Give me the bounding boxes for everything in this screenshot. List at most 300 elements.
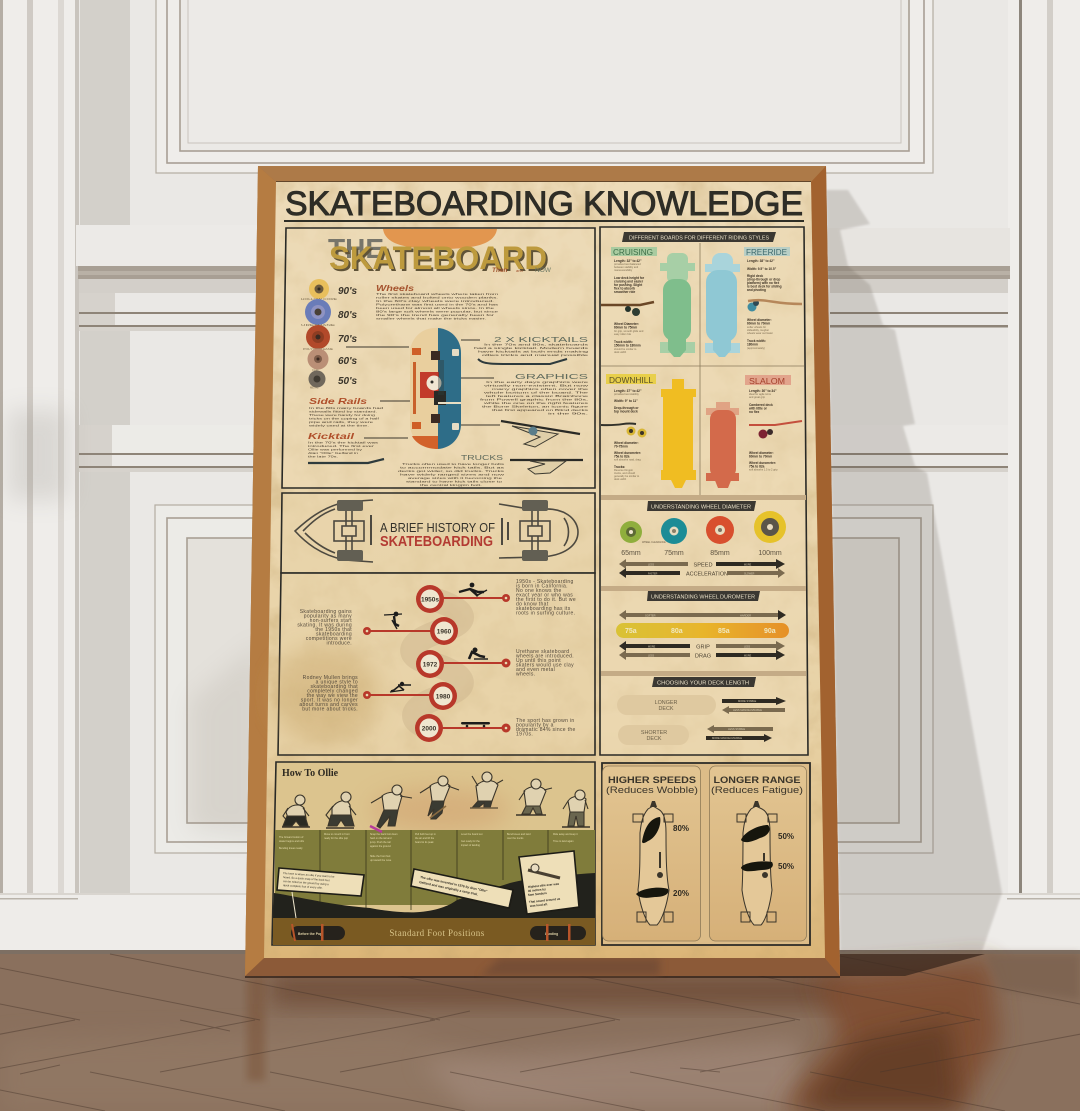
milestone 1972: 1972 bbox=[423, 662, 438, 668]
board style: slalom: with little or bbox=[748, 406, 768, 410]
board: red longboard bbox=[706, 402, 739, 488]
wheel era list: 80's bbox=[338, 310, 358, 321]
durometer scale bar: 90a bbox=[764, 628, 776, 635]
wheel era list: HOLLOW CORE bbox=[301, 297, 337, 301]
board style: cruising: maneuverability bbox=[614, 268, 633, 272]
text: graphics bbox=[480, 372, 590, 416]
wheel diameter chart: WHEEL CLEARANCE bbox=[642, 541, 666, 544]
text: wheels: the 90's the trend has generally been for bbox=[376, 313, 494, 317]
text: 1980: the way we view the bbox=[307, 693, 358, 699]
shorter deck: DECK bbox=[647, 736, 662, 742]
olive step columns: against the ground bbox=[370, 845, 391, 848]
longer deck: DECK bbox=[659, 706, 674, 712]
olive step columns: Ride away and keep it bbox=[553, 833, 578, 836]
lower right wall panel bbox=[825, 505, 933, 853]
olive step columns: ready for the ollie pop bbox=[324, 837, 349, 840]
board style: freeride: Rigid deck bbox=[747, 274, 763, 278]
text: 1950s: No one knows the bbox=[516, 588, 562, 594]
text: graphics: left features a classic Brainbone bbox=[486, 394, 589, 398]
banner: different boards: DIFFERENT BOARDS FOR DIFFERENT RIDING STYLES bbox=[629, 236, 770, 242]
brown foot position bar: Before the Pop bbox=[298, 932, 322, 936]
plank seams bbox=[0, 954, 1080, 1111]
board style: cruising: cruising and easier bbox=[614, 280, 644, 284]
wheel diameter chart: 65mm bbox=[621, 550, 641, 557]
text: 1960: skating. It was during bbox=[297, 622, 352, 628]
text: 2 x kicktails: 2 X KICKTAILS bbox=[494, 335, 588, 344]
grip and drag arrows: LESS bbox=[648, 655, 655, 658]
board style: downhill: 70-75mm bbox=[614, 444, 628, 448]
text: 1960: skateboarding bbox=[316, 632, 352, 638]
milestone 2000: 2000 bbox=[422, 726, 437, 732]
banner: wheel durometer bbox=[647, 591, 760, 601]
wheel era list: 60's bbox=[338, 356, 358, 367]
speed and acceleration arrows: FASTER bbox=[648, 573, 658, 576]
board style: slalom: SLALOM bbox=[749, 377, 785, 386]
poster bbox=[262, 180, 827, 960]
board style: downhill: DOWNHILL bbox=[609, 376, 654, 385]
callout: ollie invented: The ollie was invented in 1976 by Alan "Ollie" bbox=[420, 875, 488, 893]
wheel era list: 70's bbox=[338, 334, 358, 345]
text: 1950s bbox=[516, 579, 576, 616]
text: kicktail: the late 70s. bbox=[308, 454, 338, 458]
wheel era list bbox=[301, 279, 358, 390]
figure: step 7 bbox=[562, 790, 590, 827]
text: 1980: skateboarding that bbox=[311, 684, 358, 690]
board style: freeride: and pivoting bbox=[747, 288, 766, 292]
text: 1960: Skateboarding gains bbox=[300, 609, 352, 615]
callout: rodney mullen bbox=[519, 851, 579, 914]
board style: freeride: (approximately) bbox=[747, 346, 765, 350]
winding path shadow bbox=[412, 598, 462, 728]
text: 2000: 1970s. bbox=[516, 732, 533, 738]
grip and drag arrows: GRIP bbox=[696, 644, 710, 650]
board style: freeride: (drop-through or drop bbox=[747, 278, 780, 282]
text: 1980: but more about tricks. bbox=[302, 706, 358, 712]
text: 1960: introduce. bbox=[327, 640, 352, 646]
banner: deck length bbox=[652, 677, 756, 687]
board style: freeride: slideability, tougher bbox=[747, 328, 769, 332]
soft wall light bbox=[8, 410, 262, 840]
figure: step 6 bbox=[516, 779, 552, 815]
banner: deck length: CHOOSING YOUR DECK LENGTH bbox=[657, 680, 749, 686]
board style: freeride bbox=[744, 247, 802, 350]
heading: a brief history: A BRIEF HISTORY OF bbox=[380, 521, 495, 535]
shorter deck bbox=[618, 725, 773, 745]
callout: ollie invented: Gelfand and was originally a ramp trick. bbox=[419, 880, 479, 897]
text: kicktail: Kicktail bbox=[308, 432, 355, 441]
text: side rails: widely used at the time. bbox=[309, 424, 369, 428]
speed and acceleration arrows: LESS bbox=[648, 564, 655, 567]
board style: freeride: Truck width: bbox=[747, 339, 766, 343]
text: graphics: GRAPHICS bbox=[515, 372, 588, 381]
callout: ollie invented bbox=[411, 869, 513, 908]
callout: rodney mullen: Highest ollie ever was bbox=[528, 882, 560, 889]
panel: how to ollie bbox=[272, 762, 595, 945]
board style: downhill: deck width bbox=[614, 477, 627, 481]
text: graphics: while the one on the right features bbox=[484, 401, 589, 405]
heading: the skateboard: SKATEBOARD bbox=[331, 242, 549, 278]
text: side rails: sidewalls fitted by standard. bbox=[309, 410, 377, 414]
text: wheels: Wheels bbox=[376, 284, 415, 293]
text: side rails: tricks on the coping of a half bbox=[309, 416, 379, 420]
text: side rails: These were handy for doing bbox=[309, 413, 375, 417]
board style: downhill bbox=[601, 374, 656, 481]
lower left wall panel bbox=[155, 505, 267, 853]
longer deck: LESS MANOEUVRABLE bbox=[733, 708, 762, 712]
board style: downhill: Wheel diameter: bbox=[614, 441, 639, 445]
title: SKATEBOARDING KNOWLEDGE bbox=[285, 185, 803, 223]
text: wheels bbox=[376, 284, 499, 320]
panel: riding styles and wheels bbox=[600, 227, 808, 755]
board style: downhill: generally be similar to bbox=[614, 474, 640, 478]
text: 2000: popularity by a bbox=[516, 722, 554, 728]
milestone 1972 bbox=[416, 648, 510, 678]
speed and acceleration arrows bbox=[619, 559, 785, 578]
wheel era list: CLAY bbox=[312, 368, 319, 372]
board style: cruising: 150mm to 180mm bbox=[614, 344, 641, 348]
text: kicktail: Ollie was performed by bbox=[308, 448, 363, 452]
text: kicktail: Alan "Ollie" Gelfand in bbox=[308, 451, 358, 455]
text: trucks bbox=[398, 455, 506, 487]
board style: slalom: ideal for agile turns bbox=[749, 392, 772, 396]
text: 1980: completely changed bbox=[307, 688, 358, 694]
board style: slalom: Length: 30" to 34" bbox=[749, 389, 777, 393]
black hill silhouette bbox=[273, 873, 595, 919]
chair rail mouldings bbox=[76, 225, 1010, 472]
speed and acceleration arrows: ACCELERATION bbox=[686, 572, 728, 578]
board style: downhill: provides best stability bbox=[614, 392, 639, 396]
board style: downhill: Wheel durometer: bbox=[614, 451, 641, 455]
text: 2 x kicktails: In the 70s and 80s, skateboards bbox=[484, 342, 589, 346]
olive step columns: over the trucks bbox=[507, 837, 524, 840]
banner: different boards bbox=[622, 232, 776, 242]
board style: cruising: CRUISING bbox=[613, 248, 653, 257]
text: 1972 bbox=[516, 649, 574, 678]
olive step columns: jump. Push the tail bbox=[369, 841, 391, 844]
card: higher speeds: HIGHER SPEEDS bbox=[608, 775, 696, 786]
board: blue longboard bbox=[705, 253, 740, 357]
wall shaded strips bbox=[80, 0, 130, 894]
grip and drag arrows: DRAG bbox=[695, 654, 711, 660]
text: 2000 bbox=[516, 718, 576, 738]
poster paper bbox=[262, 180, 827, 960]
heading: the skateboard: THE bbox=[328, 233, 384, 264]
board style: freeride: Wheel diameter: bbox=[747, 318, 772, 322]
icons: trucks bbox=[501, 421, 583, 474]
text: graphics: virtually non-existent. But now bbox=[484, 384, 590, 388]
board style: slalom: Wheel durometer: bbox=[749, 461, 776, 465]
grip and drag arrows: MORE bbox=[744, 655, 752, 658]
board style: cruising: for pushing. Slight bbox=[614, 283, 643, 287]
text: side rails bbox=[309, 397, 384, 428]
left pilaster bbox=[0, 0, 79, 898]
olive step columns: Move to crouch in front bbox=[324, 833, 350, 836]
skater sequence bbox=[282, 772, 590, 832]
card: longer range: LONGER RANGE bbox=[714, 775, 800, 786]
card: higher speeds bbox=[602, 766, 700, 941]
milestone 2000 bbox=[415, 714, 510, 742]
board diagram bbox=[737, 801, 777, 925]
text: 1960: competitions were bbox=[306, 636, 352, 642]
board: yellow longboard bbox=[661, 379, 696, 488]
board style: downhill: 75a to 82a bbox=[614, 454, 630, 458]
text: trucks: the central kingpin bolt. bbox=[420, 483, 482, 487]
right pilaster bbox=[1008, 0, 1080, 898]
text: 1972: Up until this point bbox=[516, 658, 561, 664]
text: wheels: Polyurethane was first used in the 70's and has bbox=[376, 302, 499, 306]
olive step columns: Bending knees ready bbox=[279, 847, 303, 850]
text: 1980 bbox=[299, 675, 358, 712]
herringbone wood floor bbox=[0, 954, 1080, 1111]
text: 1980: sport. It was no longer bbox=[301, 698, 358, 704]
upper wall moulding panel bbox=[156, 0, 933, 173]
panel: brief history header bbox=[281, 493, 595, 573]
panel: the skateboard then and now bbox=[282, 228, 595, 488]
text: graphics: in the 90s. bbox=[548, 412, 588, 416]
text: graphics: that first appeared on Blind decks bbox=[492, 408, 589, 412]
board style: slalom bbox=[745, 375, 802, 472]
callout: the knee tip: heard. So a quick snap of the back foot bbox=[283, 875, 330, 882]
milestone 1950s bbox=[416, 583, 510, 613]
board style: cruising: easy roller ride bbox=[614, 332, 632, 336]
text: graphics: from Powell graphic from the 80s, bbox=[480, 398, 588, 402]
text: trucks: Trucks often used to have longer bolts bbox=[402, 462, 505, 466]
text: 1972: wheels. bbox=[516, 672, 535, 678]
board style: downhill: top mount deck bbox=[614, 410, 638, 414]
card: longer range: (Reduces Fatigue) bbox=[711, 785, 803, 795]
longer deck: LONGER bbox=[655, 700, 677, 706]
board style: downhill: trucks, and should bbox=[614, 471, 636, 475]
heading: the skateboard: and bbox=[516, 268, 523, 273]
board style: freeride: is best deck for sliding bbox=[747, 284, 782, 288]
milestone 1960: 1960 bbox=[437, 628, 452, 636]
text: kicktail: In the 70's the kicktail was bbox=[308, 440, 379, 444]
board style: slalom: 60mm to 70mm bbox=[749, 454, 772, 458]
board style: downhill: Width: 9" to 11" bbox=[614, 399, 638, 403]
text: 1980: Rodney Mullen brings bbox=[303, 675, 358, 681]
text: 1972: Urethane skateboard bbox=[516, 649, 569, 655]
board style: freeride: Length: 38" to 42" bbox=[747, 259, 775, 263]
text: wheels: been used for almost all wheels since. In the bbox=[376, 306, 495, 310]
board style: slalom: Wheel diameter: bbox=[749, 451, 774, 455]
callout: the knee tip bbox=[277, 868, 364, 918]
durometer arrow bbox=[619, 610, 786, 620]
icon: skater bbox=[459, 583, 487, 596]
text: 1950s: do know that bbox=[516, 602, 549, 608]
board style: slalom: no flex bbox=[749, 410, 759, 414]
heading: a brief history: SKATEBOARDING bbox=[380, 533, 493, 550]
callout: rodney mullen: was loud all. bbox=[529, 902, 548, 908]
wheel diameter chart: 100mm bbox=[758, 550, 782, 557]
heading: how to ollie: How To Ollie bbox=[282, 768, 339, 779]
board diagram bbox=[633, 801, 673, 925]
text: trucks: have widely ranged sizes and now bbox=[400, 472, 506, 476]
durometer scale bar: 85a bbox=[718, 628, 730, 635]
board style: freeride: platform) with no flex bbox=[747, 281, 779, 285]
board style: cruising: for grip, smooth glide and bbox=[614, 329, 644, 333]
brown foot position bar: Landing bbox=[545, 932, 558, 936]
board style: downhill: Length: 37" to 42" bbox=[614, 389, 642, 393]
heading: the skateboard: Then bbox=[492, 267, 508, 274]
board style: freeride: Width: 9.5" to 10.5" bbox=[747, 267, 777, 271]
panel: timeline bbox=[270, 573, 595, 755]
callout: rodney mullen: That sound around us bbox=[529, 897, 561, 904]
milestone 1950s: 1950s bbox=[421, 596, 439, 604]
board style: cruising bbox=[601, 247, 657, 354]
text: 1972: skaters would use clay bbox=[516, 662, 574, 668]
wheel era list: URETHANE bbox=[301, 323, 336, 327]
text: wheels: The first skateboard wheels where taken from bbox=[376, 292, 499, 296]
text: side rails: In the 80s many boards had bbox=[309, 406, 384, 410]
olive step columns: Level the board out bbox=[461, 833, 483, 836]
brown foot position bar bbox=[273, 918, 595, 945]
figure: step 4 bbox=[420, 776, 459, 819]
text: kicktail bbox=[308, 432, 384, 463]
board style: cruising: provides best balanced bbox=[614, 262, 641, 266]
wheel era list: METAL bbox=[310, 386, 319, 390]
figure: step 5 bbox=[470, 772, 503, 808]
card: longer range: 50% bbox=[778, 862, 794, 871]
board style: cruising: Wheel Diameter: bbox=[614, 322, 639, 326]
text: graphics: In the early days graphics were bbox=[486, 380, 589, 384]
card: higher speeds: 20% bbox=[673, 889, 689, 898]
board style: cruising: deck width bbox=[614, 350, 627, 354]
text: 1960: the 1950s that bbox=[315, 627, 352, 633]
olive step columns: impact of landing bbox=[461, 844, 481, 847]
olive step columns: The forward motion of bbox=[279, 836, 304, 839]
text: graphics: whole bottom of the board. The bbox=[484, 390, 589, 394]
figure: step 1 bbox=[282, 795, 310, 827]
callout: the knee tip: quick complete foot of every ollie. bbox=[283, 883, 323, 890]
figure: step 3 bbox=[370, 785, 412, 832]
board style: cruising: between stability and bbox=[614, 265, 639, 269]
board style: cruising: should be similar to bbox=[614, 347, 637, 351]
board style: slalom: 75a to 82a bbox=[749, 464, 765, 468]
olive step columns: the air and lift the bbox=[415, 837, 435, 840]
text: 1960: popularity as many bbox=[304, 614, 352, 620]
grip and drag arrows: LESS bbox=[744, 646, 751, 649]
baseboard bbox=[0, 893, 1080, 954]
text: trucks: TRUCKS bbox=[461, 455, 503, 462]
shorter deck: LESS STABLE bbox=[728, 727, 745, 731]
milestone 1980 bbox=[363, 682, 457, 710]
board style: cruising: flex to absorb bbox=[614, 286, 635, 290]
board style: freeride: wheels wear out faster bbox=[747, 331, 773, 335]
text: trucks: average sizes with it becoming the bbox=[408, 476, 503, 480]
board style: freeride: softer wheels for bbox=[747, 325, 766, 329]
wheel era list: 50's bbox=[338, 376, 358, 387]
board style: slalom: soft absorbs 1.5 to 2 grip bbox=[749, 468, 778, 472]
durometer scale bar bbox=[616, 623, 789, 638]
text: 1950s: the first to do it. But we bbox=[516, 597, 576, 603]
board style: downhill: Reverse Kingpin bbox=[614, 468, 634, 472]
heading: the skateboard: SKATEBOARD bbox=[329, 240, 547, 276]
wheel era list: POLYURETHANE bbox=[303, 347, 333, 351]
text: 2 x kicktails: had a single kicktail. Modern boards bbox=[474, 346, 589, 350]
brown foot position bar: Standard Foot Positions bbox=[389, 928, 485, 938]
icon: skateboard tail right bbox=[499, 500, 578, 561]
card: higher speeds: 80% bbox=[673, 824, 689, 833]
icon: skater bbox=[384, 612, 402, 629]
longer deck: MORE STABLE bbox=[738, 699, 757, 703]
olive step columns: Bend knees and land bbox=[507, 833, 531, 836]
banner: wheel durometer: UNDERSTANDING WHEEL DUROMETER bbox=[651, 594, 755, 600]
board style: cruising: smoother ride bbox=[614, 290, 635, 294]
speed and acceleration arrows: SPEED bbox=[694, 562, 712, 568]
olive step columns: Time to land again bbox=[553, 840, 574, 843]
text: graphics: the Bone Skeleton, an iconic figure bbox=[482, 404, 589, 408]
text: 1972: wheels are introduced. bbox=[516, 654, 574, 660]
milestone 1980: 1980 bbox=[436, 694, 451, 700]
heading: the skateboard: NOW bbox=[535, 267, 552, 274]
text: trucks: standard to have kick tails close to bbox=[406, 480, 503, 484]
icon: skater bbox=[390, 682, 411, 692]
speed and acceleration arrows: MORE bbox=[744, 564, 752, 567]
olive step columns: up toward the nose bbox=[370, 859, 392, 862]
panel: foot placement bbox=[602, 763, 810, 945]
text: 1960: non-surfers start bbox=[310, 618, 352, 624]
shorter deck: SHORTER bbox=[641, 730, 667, 736]
card: longer range: 50% bbox=[778, 832, 794, 841]
text: 1960 bbox=[297, 609, 352, 646]
durometer arrow: SOFTER bbox=[645, 614, 656, 618]
text: 1950s: is born in California. bbox=[516, 584, 568, 590]
olive step columns: Snap the back foot down bbox=[370, 833, 398, 836]
olive step columns: Pull both feet up in bbox=[415, 833, 436, 836]
wheel diameter chart bbox=[620, 511, 786, 557]
olive step columns: Get ready for the bbox=[461, 840, 480, 843]
text: 1950s: skateboarding has its bbox=[516, 606, 571, 612]
grip and drag arrows: MORE bbox=[648, 646, 656, 649]
board style: freeride: 180mm bbox=[747, 342, 758, 346]
banner: wheel diameter bbox=[647, 501, 756, 511]
icon: skater bbox=[469, 648, 488, 659]
heading: a brief history bbox=[380, 521, 495, 550]
text: wheels: smaller wheels that make the tricks easier. bbox=[376, 316, 486, 320]
text: 1950s: 1950s - Skateboarding bbox=[516, 579, 574, 585]
banner: wheel diameter: UNDERSTANDING WHEEL DIAMETER bbox=[651, 504, 751, 510]
grip and drag arrows bbox=[619, 641, 785, 660]
text: kicktail: introduced. The first ever bbox=[308, 444, 374, 448]
text: trucks: to accommodate kick tails. But as bbox=[400, 466, 505, 470]
text: wheels: roller skates and bolted onto wooden planks. bbox=[376, 296, 498, 300]
wheel diameter chart: 75mm bbox=[664, 550, 684, 557]
text: 1950s: roots in surfing culture. bbox=[516, 610, 575, 616]
text: wheels: In the 60's clay wheels were introduced. bbox=[376, 299, 494, 303]
milestone 1960 bbox=[363, 612, 458, 645]
text: 2000: The sport has grown in bbox=[516, 718, 575, 724]
text: wheels: 80's large soft wheels were popular, but since bbox=[376, 310, 499, 314]
text: 2 x kicktails: ollies tricks and manual possible bbox=[482, 353, 589, 357]
board style: freeride: 60mm to 70mm bbox=[747, 322, 770, 326]
skateboard illustration bbox=[410, 328, 461, 449]
icon: skateboard nose left bbox=[295, 500, 373, 562]
text: 1972: and even metal bbox=[516, 667, 555, 673]
longer deck bbox=[617, 695, 786, 715]
board style: freeride: FREERIDE bbox=[746, 248, 787, 257]
board style: slalom: Cambered deck bbox=[749, 403, 773, 407]
board style: cruising: Truck width: bbox=[614, 340, 633, 344]
leader lines bbox=[346, 340, 500, 438]
wheel era list: 90's bbox=[338, 286, 358, 297]
text: 2 x kicktails bbox=[474, 335, 589, 364]
board style: downhill: soft absorbs road, drag bbox=[614, 458, 641, 462]
board style: cruising: Length: 32" to 42" bbox=[614, 259, 642, 263]
text: trucks: decks got wider, so did trucks. Trucks bbox=[398, 469, 505, 473]
text: graphics: many graphics often cover the bbox=[492, 387, 589, 391]
board style: downhill: Trucks: bbox=[614, 465, 625, 469]
text: 2 x kicktails: have kicktails at both ends making bbox=[478, 350, 589, 354]
